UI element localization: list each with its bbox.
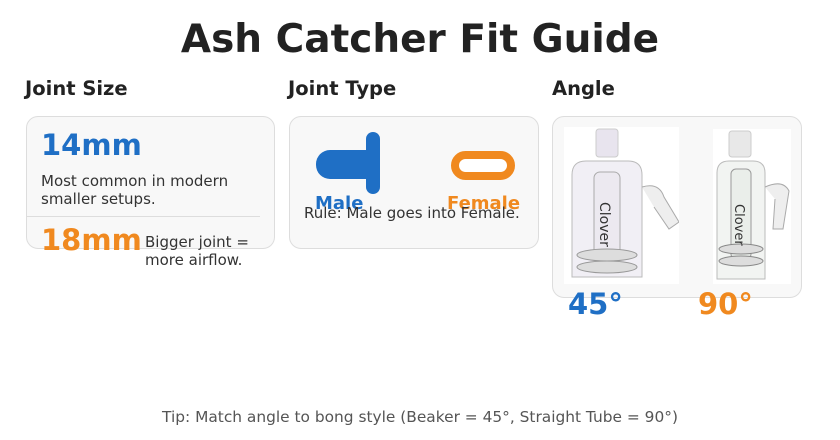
- rule text: Rule: Male goes into Female.: [304, 204, 520, 222]
- 14mm description: [41, 172, 228, 208]
- tip footer: Tip: Match angle to bong style (Beaker = 45°, Straight Tube = 90°): [162, 408, 678, 426]
- title: Ash Catcher Fit Guide: [181, 17, 659, 62]
- panel: joint size: [26, 116, 275, 249]
- 14mm label: 14mm: [41, 128, 142, 162]
- 14mm description: Most common in modern: [41, 172, 228, 190]
- icon: male joint: [316, 132, 380, 194]
- 18mm description: [145, 233, 249, 269]
- 14mm description: smaller setups.: [41, 190, 156, 208]
- image: 90 degree ash catcher: [716, 130, 790, 280]
- label: 45 degrees: 45°: [568, 287, 623, 321]
- heading: angle: Angle: [552, 77, 615, 100]
- heading: joint type: Joint Type: [288, 77, 396, 100]
- icon: female joint: [451, 151, 515, 180]
- label: male: Male: [315, 193, 363, 214]
- panel: angle: [552, 116, 802, 298]
- image: 90 degree ash catcher: Clover: [731, 204, 746, 246]
- heading: joint size: Joint Size: [25, 77, 128, 100]
- label: 90 degrees: 90°: [698, 287, 753, 321]
- image: 45 degree ash catcher: Clover: [596, 202, 612, 247]
- 18mm description: more airflow.: [145, 251, 242, 269]
- label: female: Female: [447, 193, 520, 214]
- image: 45 degree ash catcher: [572, 128, 679, 278]
- panel: joint type: [289, 116, 539, 249]
- 18mm description: Bigger joint =: [145, 233, 249, 251]
- 18mm label: 18mm: [41, 223, 142, 257]
